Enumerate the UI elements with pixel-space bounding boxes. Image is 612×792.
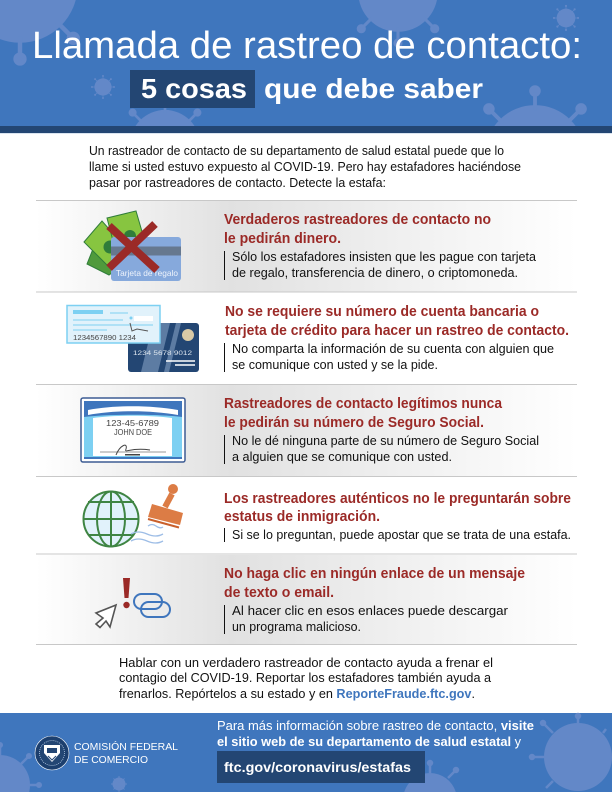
icon: check and credit card: 1234567890 1234	[73, 335, 136, 342]
body text: un programa malicioso.	[232, 620, 361, 634]
agency name: DE COMERCIO	[74, 754, 148, 766]
heading: Los rastreadores auténticos no le preguntarán sobre	[224, 491, 571, 507]
panel: row 3 social security	[36, 385, 577, 476]
more information text: Para más información sobre rastreo de contacto, visite	[217, 719, 534, 733]
title: que debe saber	[264, 73, 483, 104]
agency name: COMISIÓN FEDERAL	[74, 740, 178, 753]
closing text: contagio del COVID-19. Reportar los estafadores también ayuda a	[119, 671, 491, 685]
closing text: frenarlos. Repórtelos a su estado y en ReporteFraude.ftc.gov.	[119, 687, 475, 701]
icon: social security card: JOHN DOE	[114, 428, 152, 437]
heading: tarjeta de crédito para hacer un rastreo de contacto.	[225, 323, 569, 339]
intro text: Un rastreador de contacto de su departamento de salud estatal puede que lo	[89, 144, 504, 158]
icon: money and gift card: Tarjeta de regalo	[116, 268, 178, 278]
heading: Rastreadores de contacto legítimos nunca	[224, 396, 503, 412]
panel: row 1 no money	[36, 200, 577, 292]
closing text	[119, 656, 493, 701]
footer banner	[0, 713, 612, 792]
panel: row 2 bank account	[36, 304, 577, 384]
url box	[217, 751, 425, 783]
body text: No comparta la información de su cuenta con alguien que	[232, 342, 554, 356]
heading	[224, 396, 503, 431]
title: 5 cosas	[141, 73, 247, 104]
header banner	[0, 0, 612, 134]
body text: de regalo, transferencia de dinero, o criptomoneda.	[232, 266, 518, 280]
panel: row 5 links	[36, 555, 577, 645]
heading	[225, 304, 569, 339]
icon: cursor warning and link	[96, 578, 170, 628]
heading: le pedirán dinero.	[224, 231, 341, 247]
icon: check and credit card: 1234 5678 9012	[133, 350, 192, 357]
body text	[224, 250, 536, 280]
body text: se comunique con usted y se la pide.	[232, 358, 438, 372]
icon: money and gift card	[84, 211, 181, 281]
heading	[224, 212, 491, 247]
body text	[224, 342, 554, 372]
agency name	[74, 740, 178, 766]
body text: No le dé ninguna parte de su número de Seguro Social	[232, 434, 539, 448]
body text: Al hacer clic en esos enlaces puede descargar	[232, 604, 508, 618]
closing text: Hablar con un verdadero rastreador de contacto ayuda a frenar el	[119, 656, 493, 670]
body text: Sólo los estafadores insisten que les pague con tarjeta	[232, 250, 536, 264]
intro text: llame si usted estuvo expuesto al COVID-19. Pero hay estafadores haciéndose	[89, 160, 521, 174]
icon: social security card: 123-45-6789	[106, 418, 159, 428]
icon: globe and stamp	[84, 484, 183, 547]
url box: ftc.gov/coronavirus/estafas	[224, 759, 411, 775]
body text: Si se lo preguntan, puede apostar que se trata de una estafa.	[232, 528, 571, 542]
intro text: pasar por rastreadores de contacto. Detecte la estafa:	[89, 176, 386, 190]
heading: estatus de inmigración.	[224, 509, 380, 525]
heading: No se requiere su número de cuenta bancaria o	[225, 304, 539, 320]
body text	[224, 434, 539, 464]
icon: social security card	[81, 398, 185, 462]
logo: FTC seal	[35, 736, 69, 770]
heading: Verdaderos rastreadores de contacto no	[224, 212, 491, 228]
heading	[224, 491, 571, 525]
body text	[224, 604, 508, 634]
heading: de texto o email.	[224, 585, 334, 601]
title: Llamada de rastreo de contacto:	[32, 25, 582, 67]
intro text	[89, 144, 521, 190]
panel: row 4 immigration	[36, 484, 577, 554]
heading	[224, 566, 525, 601]
heading: No haga clic en ningún enlace de un mensaje	[224, 566, 525, 582]
more information text	[217, 719, 534, 749]
heading: le pedirán su número de Seguro Social.	[224, 415, 484, 431]
title	[32, 25, 582, 108]
icon: check and credit card	[67, 306, 199, 372]
body text: a alguien que se comunique con usted.	[232, 450, 452, 464]
more information text: el sitio web de su departamento de salud estatal y	[217, 735, 522, 749]
